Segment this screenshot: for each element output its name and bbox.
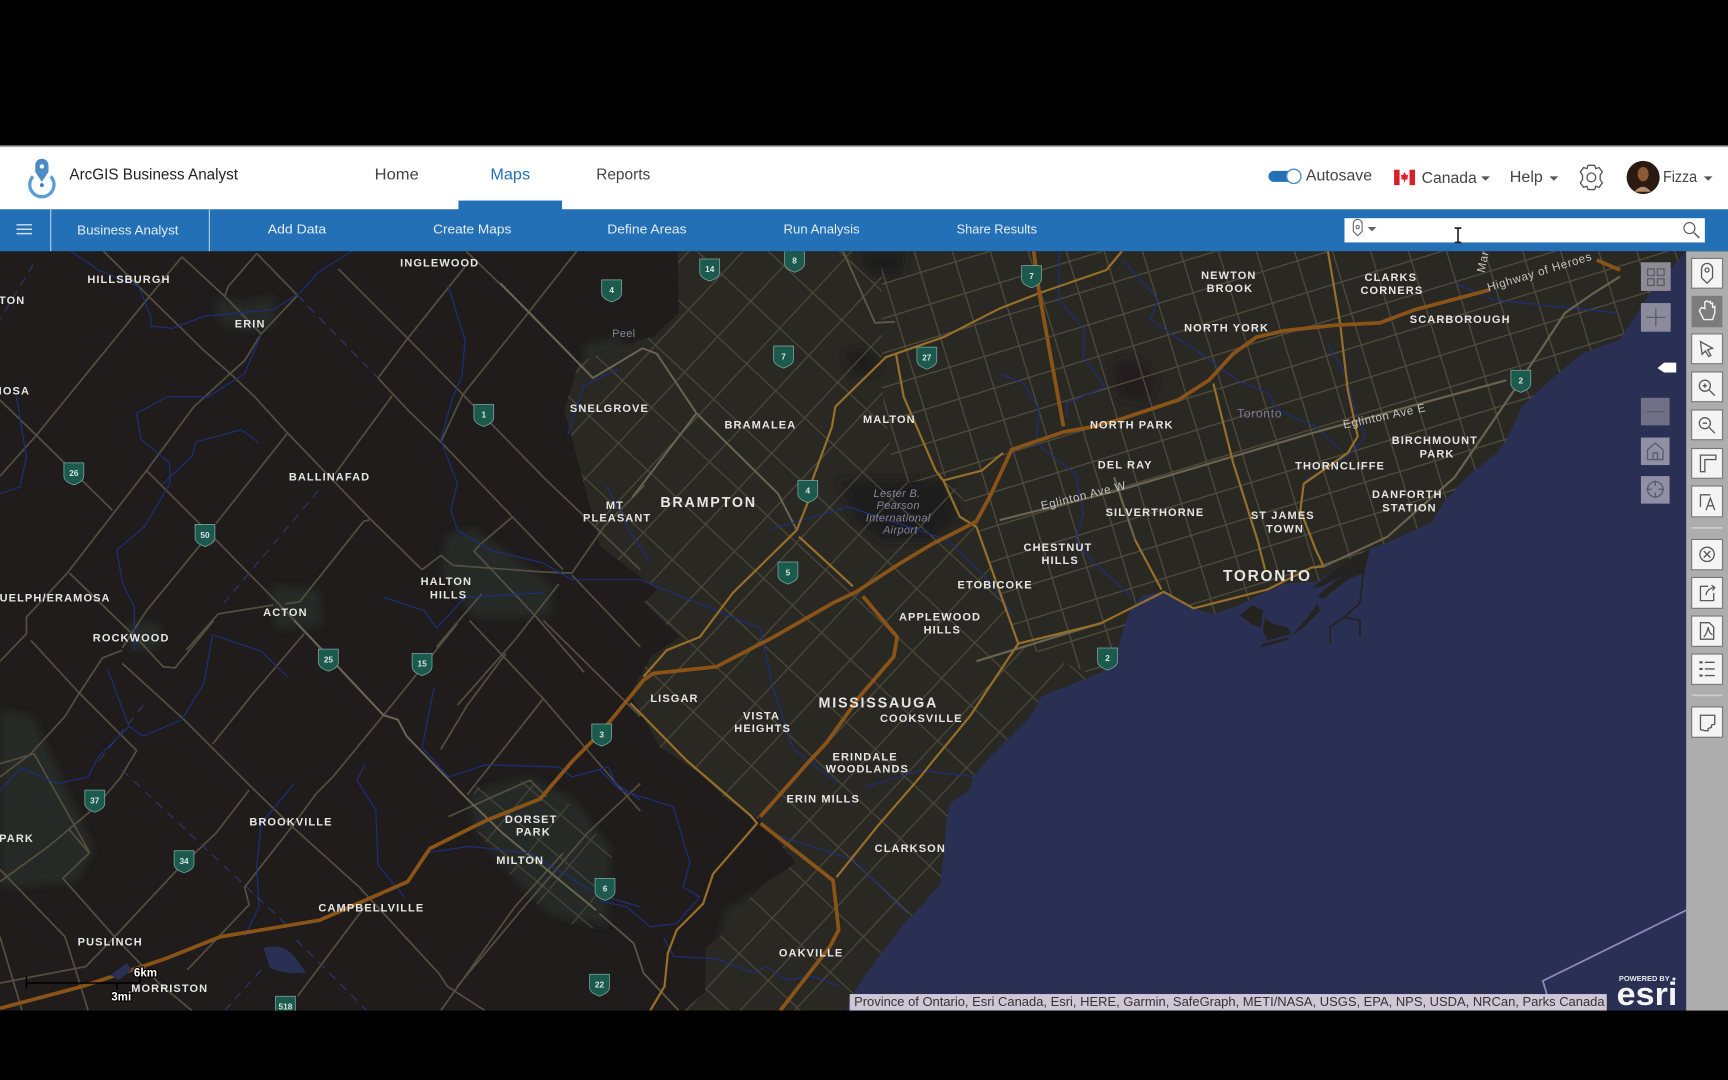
place labels: MORRISTON: [131, 983, 208, 995]
road name labels: Eglinton Ave E: [1342, 402, 1427, 432]
place labels: TOWN: [1266, 523, 1304, 535]
highway shields: 25: [324, 655, 333, 664]
place labels: MALTON: [863, 414, 916, 426]
tool: pin: [1692, 258, 1722, 288]
app title: ArcGIS Business Analyst: [69, 167, 239, 184]
darker airport and parkland patches: [840, 251, 1157, 540]
place labels: CORNERS: [1360, 285, 1423, 297]
help menu: [1510, 169, 1558, 186]
autosave label: Autosave: [1306, 168, 1372, 185]
place labels: HILLSBURGH: [87, 274, 171, 286]
tab: home: Home: [375, 167, 419, 184]
secondary highways: [630, 251, 1358, 1011]
place labels: BRAMPTON: [660, 495, 757, 511]
place labels: CLARKS: [1365, 272, 1417, 284]
milton and rural town street grid: [474, 780, 612, 931]
user avatar: [1627, 161, 1660, 194]
highway shields: 1: [481, 411, 486, 420]
toolbar: create maps: Create Maps: [433, 222, 512, 237]
rivers: [0, 250, 1620, 986]
map controls: [1641, 262, 1676, 504]
place labels: BROOK: [1207, 283, 1253, 295]
place labels: HILLS: [430, 589, 467, 601]
place labels: DANFORTH: [1372, 489, 1443, 501]
zoom out button: [1641, 398, 1670, 425]
urban land tone: [564, 251, 1686, 1011]
place labels: BIRCHMOUNT: [1392, 435, 1478, 447]
scale bar: 6km: [134, 967, 157, 979]
highway shields: 4: [805, 487, 810, 496]
italic region and airport labels: Peel: [612, 328, 635, 340]
place labels: APPLEWOOD: [899, 611, 981, 623]
place labels: NEWTON: [1201, 270, 1256, 282]
tool: zoom out: [1692, 410, 1722, 440]
highway shields: 15: [417, 660, 427, 669]
esri logo: POWERED BY ●: [1619, 975, 1676, 983]
highway shields: 8: [792, 256, 797, 265]
boundary line: [1543, 910, 1686, 1011]
road name labels: Eglinton Ave W: [1040, 480, 1128, 513]
light expressways: [976, 277, 1620, 661]
place labels: ROCKWOOD: [93, 632, 170, 644]
place labels: MILTON: [496, 855, 544, 867]
highway shields: 4: [609, 286, 614, 295]
mississauga and brampton street grid: [568, 252, 1086, 1010]
icon: canada flag: [1394, 170, 1415, 185]
tool: share: [1692, 577, 1722, 608]
toronto islands and leslie spit: [1240, 549, 1370, 648]
rural roads: [0, 250, 895, 1011]
inland lakes: [110, 947, 306, 980]
italic region and airport labels: Toronto: [1237, 407, 1282, 421]
place labels: STATION: [1382, 502, 1437, 514]
place labels: THORNCLIFFE: [1295, 460, 1385, 472]
place labels: UELPH/ERAMOSA: [0, 593, 111, 605]
lake ontario: [846, 251, 1686, 1011]
place labels: BROOKVILLE: [249, 816, 333, 828]
basemap button: [1641, 262, 1671, 291]
icon: hamburger menu: [17, 225, 32, 234]
place labels: NORTH PARK: [1090, 420, 1174, 432]
place labels: HALTON: [421, 576, 472, 588]
tool: measure: [1692, 449, 1722, 478]
place labels: OAKVILLE: [779, 948, 843, 960]
italic region and airport labels: Pearson: [876, 500, 920, 512]
place labels: TORONTO: [1223, 568, 1312, 585]
road name labels: Mar: [1476, 250, 1492, 274]
place labels: CAMPBELLVILLE: [318, 902, 424, 914]
highway shields: 7: [1029, 272, 1034, 281]
esri logo: esri: [1617, 976, 1677, 1012]
toolbar: define areas: Define Areas: [607, 222, 687, 237]
place labels: BALLINAFAD: [289, 471, 370, 483]
highway shields: 26: [69, 469, 79, 478]
highway shields: 22: [595, 980, 605, 989]
attribution: Province of Ontario, Esri Canada, Esri, HERE, Garmin, SafeGraph, METI/NASA, USGS, EPA, NPS, USDA, NRCan, Parks Canada: [854, 994, 1605, 1009]
place labels: PUSLINCH: [78, 937, 143, 949]
place labels: DORSET: [505, 814, 557, 826]
place labels: LISGAR: [650, 693, 699, 705]
highway shields: [64, 250, 1531, 1018]
highway shields: 2: [1519, 377, 1524, 386]
place labels: SCARBOROUGH: [1410, 314, 1511, 326]
highway shields: 14: [705, 265, 715, 274]
place labels: ST JAMES: [1251, 510, 1315, 522]
scale bar: [26, 967, 157, 1004]
icon: business analyst logo: [30, 159, 54, 197]
place labels: NORTH YORK: [1184, 323, 1269, 335]
toolbar: add data: Add Data: [268, 222, 327, 237]
highway shields: 34: [179, 857, 189, 866]
locate button: [1641, 476, 1670, 504]
place labels: INGLEWOOD: [400, 258, 479, 270]
forest patches: [0, 295, 793, 948]
tool: note: [1692, 707, 1722, 737]
highway shields: 27: [922, 353, 932, 362]
place labels: HILLS: [924, 625, 961, 637]
highway shields: 6: [603, 885, 608, 894]
tool: clear: [1692, 539, 1722, 570]
home button: [1641, 438, 1670, 465]
italic region and airport labels: Airport: [882, 524, 918, 536]
country selector: Canada: [1422, 170, 1477, 187]
township boundaries: [0, 264, 378, 1011]
place labels: PLEASANT: [583, 512, 651, 524]
highway shields: 50: [200, 531, 210, 540]
highway shields: 37: [90, 796, 100, 805]
toolbar: run analysis: Run Analysis: [784, 222, 860, 237]
place labels: VISTA: [743, 711, 780, 723]
road name labels: Highway of Heroes: [1486, 251, 1594, 294]
highway shields: 518: [279, 1002, 293, 1011]
road name labels: [1040, 250, 1594, 513]
active tab indicator: [458, 201, 562, 210]
place labels: SILVERTHORNE: [1106, 507, 1204, 519]
place labels: HEIGHTS: [734, 723, 791, 735]
tool: list: [1692, 654, 1722, 684]
place labels: MISSISSAUGA: [819, 696, 938, 712]
text cursor: [1455, 228, 1461, 242]
tool: text annotation: [1692, 486, 1722, 517]
place labels: ERINDALE: [833, 751, 898, 763]
toronto street grid: [882, 252, 1678, 672]
place labels: DEL RAY: [1098, 459, 1153, 471]
tab: maps: Maps: [490, 167, 530, 184]
highway shields: 3: [599, 730, 604, 739]
italic region and airport labels: Lester B.: [874, 488, 921, 500]
toolbar: share results: Share Results: [957, 222, 1037, 237]
place labels: COOKSVILLE: [880, 713, 963, 725]
place labels: PARK: [516, 826, 551, 838]
search box: [1344, 218, 1705, 242]
place labels: ETOBICOKE: [958, 579, 1033, 591]
place labels: ERIN MILLS: [786, 793, 860, 805]
autosave toggle: [1268, 169, 1302, 183]
tool: zoom in: [1692, 372, 1722, 402]
place labels: PARK: [0, 833, 34, 845]
toolbar bar: [0, 201, 1728, 251]
place labels: ERIN: [235, 318, 266, 330]
tab: reports: Reports: [596, 167, 650, 184]
rural land base: [0, 252, 796, 1010]
highway shields: 2: [1105, 654, 1110, 663]
tool: pan hand: [1692, 296, 1722, 327]
place labels: MT: [606, 500, 624, 512]
highway shields: 7: [781, 352, 786, 361]
header bar: [0, 145, 1728, 209]
place labels: SNELGROVE: [570, 403, 649, 415]
italic region and airport labels: [612, 328, 1282, 536]
place labels: [0, 258, 1511, 995]
place labels: BRAMALEA: [724, 420, 796, 432]
right tool panel: [1686, 251, 1728, 1011]
tool: select arrow: [1692, 334, 1722, 364]
place labels: CLARKSON: [875, 843, 946, 855]
toolbar: business analyst: Business Analyst: [77, 223, 179, 238]
place labels: CHESTNUT: [1024, 542, 1092, 554]
place labels: ACTON: [263, 607, 308, 619]
icon: settings gear: [1580, 165, 1602, 190]
zoom in button: [1641, 303, 1671, 332]
help menu: Help: [1510, 169, 1543, 186]
zoom slider marker: [1657, 363, 1676, 372]
user menu: Fizza: [1663, 169, 1698, 186]
highway shields: 5: [786, 568, 791, 577]
highway 401 and main freeways: [0, 251, 1620, 1011]
tool: export pdf: [1692, 616, 1722, 646]
place labels: WOODLANDS: [826, 764, 909, 776]
map: [0, 250, 1686, 1018]
place labels: PARK: [1420, 448, 1454, 460]
place labels: HILLS: [1041, 555, 1079, 567]
scale bar: 3mi: [111, 992, 131, 1004]
italic region and airport labels: International: [866, 512, 931, 524]
